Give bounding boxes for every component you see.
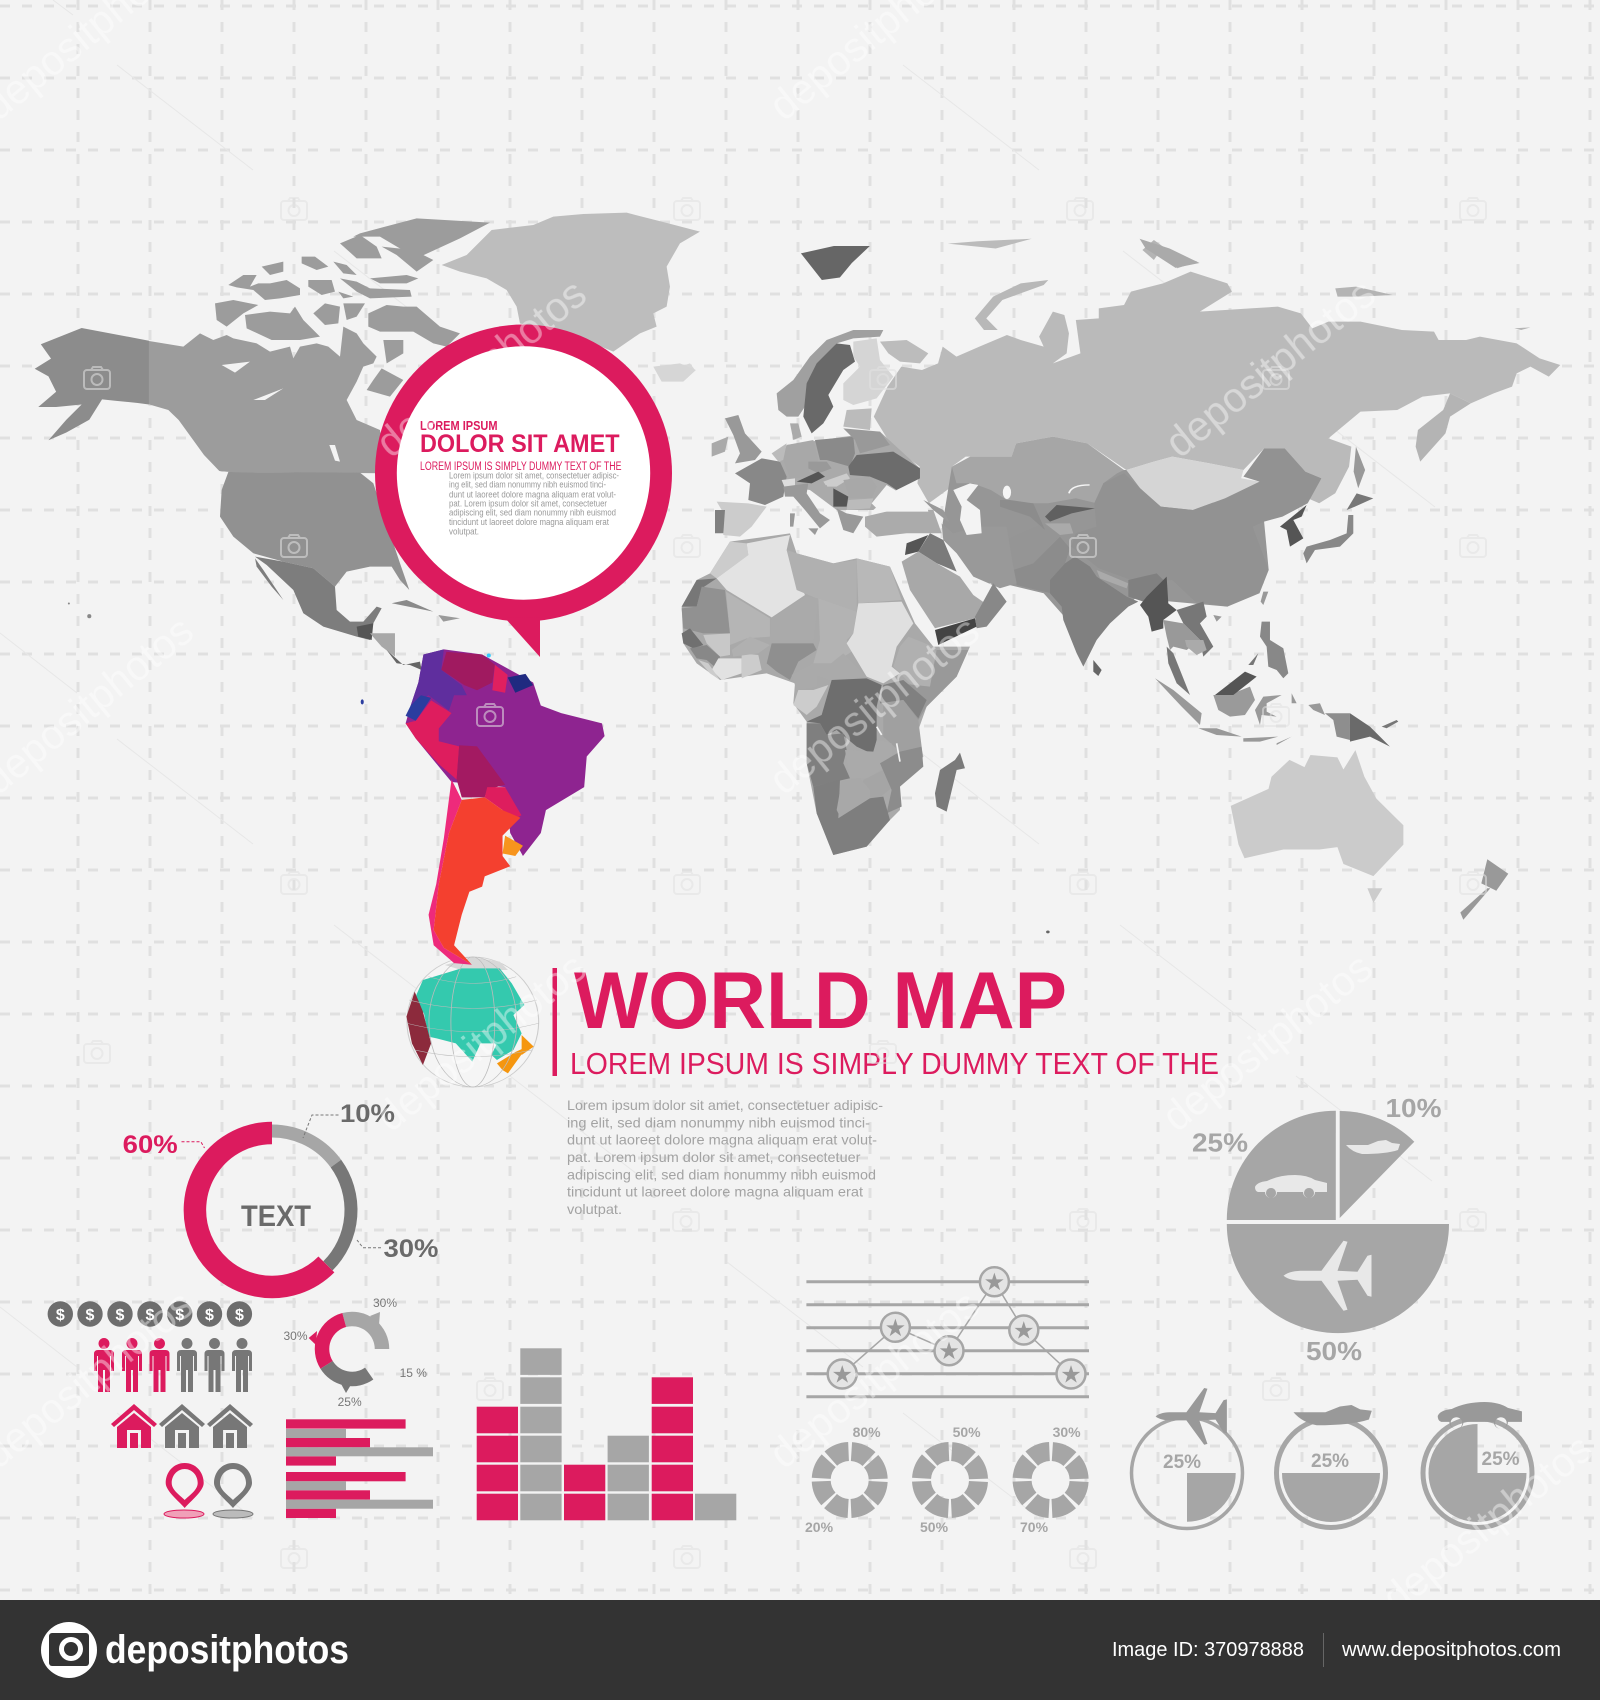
region: South America: [361, 649, 605, 965]
line chart with stars: [806, 1267, 1089, 1397]
callout text: DOLOR SIT AMET: [420, 430, 620, 458]
icon: globe: [406, 957, 539, 1087]
callout text: LOREM IPSUM: [420, 419, 498, 433]
logo: depositphotos: [105, 1628, 349, 1672]
line chart with stars: ★: [885, 1315, 906, 1342]
small donut chart: 30%: [373, 1296, 397, 1310]
icons: people: [94, 1338, 252, 1392]
icons: map pins: [164, 1463, 253, 1518]
body text: volutpat.: [567, 1201, 622, 1217]
text: depositphotos: [760, 606, 988, 803]
gauge: plane 25%: [1132, 1388, 1242, 1528]
text: depositphotos: [1156, 269, 1384, 466]
icons: coins: $: [235, 1307, 244, 1324]
icons: coins: $: [86, 1307, 95, 1324]
gauge: boat 25%: [1276, 1405, 1386, 1528]
body text: ing elit, sed diam nonummy nibh euismod tinci-: [567, 1114, 870, 1130]
segmented donuts: 70%: [1020, 1519, 1049, 1535]
map: Africa: [682, 533, 970, 855]
donut chart: 60 10 30: 10%: [340, 1100, 395, 1128]
text: depositphotos: [367, 269, 595, 466]
callout text: dunt ut laoreet dolore magna aliquam erat volut-: [449, 489, 616, 499]
text: depositphotos: [1373, 1424, 1600, 1621]
pie chart: transport: [1192, 1093, 1449, 1366]
callout text: pat. Lorem ipsum dolor sit amet, consectetuer: [449, 498, 607, 508]
map: Oceania and Arctic islands: [801, 239, 1508, 933]
line chart with stars: ★: [1060, 1362, 1082, 1388]
body text: [567, 1097, 883, 1217]
body text: dunt ut laoreet dolore magna aliquam erat volut-: [567, 1132, 877, 1148]
callout text: LOREM IPSUM IS SIMPLY DUMMY TEXT OF THE: [420, 461, 622, 473]
line chart with stars: ★: [831, 1362, 853, 1388]
donut chart: 60 10 30: 30%: [384, 1235, 438, 1263]
body text: pat. Lorem ipsum dolor sit amet, consectetuer: [567, 1149, 861, 1165]
stacked block chart: [477, 1348, 736, 1520]
map: North America: [149, 213, 700, 670]
icons: coins: $: [205, 1307, 214, 1324]
pie chart: transport: 10%: [1386, 1093, 1442, 1123]
small donut chart: 25%: [338, 1395, 362, 1409]
body text: tincidunt ut laoreet dolore magna aliquam erat: [567, 1184, 863, 1200]
pie chart: transport: 50%: [1306, 1336, 1362, 1366]
heading: world map: WORLD MAP: [574, 956, 1067, 1046]
icons: coins: $: [146, 1307, 155, 1324]
callout text: tincidunt ut laoreet dolore magna aliquam erat: [449, 517, 609, 527]
subheading: LOREM IPSUM IS SIMPLY DUMMY TEXT OF THE: [570, 1046, 1219, 1081]
gauge: plane 25%: 25%: [1163, 1452, 1201, 1473]
segmented donuts: 50%: [920, 1519, 949, 1535]
gauge: car 25%: 25%: [1482, 1449, 1520, 1470]
line chart with stars: ★: [1013, 1318, 1035, 1344]
icons: coins: [48, 1301, 252, 1327]
donut chart: 60 10 30: [123, 1100, 438, 1287]
gauge: car 25%: [1423, 1402, 1532, 1528]
body text: Lorem ipsum dolor sit amet, consectetuer adipisc-: [567, 1097, 883, 1113]
callout text: [420, 419, 622, 537]
body text: adipiscing elit, sed diam nonummy nibh euismod: [567, 1166, 876, 1182]
pie chart: transport: 25%: [1192, 1128, 1248, 1158]
segmented donuts: [805, 1424, 1081, 1535]
line chart with stars: ★: [984, 1269, 1005, 1296]
website: www.depositphotos.com: [1341, 1639, 1561, 1661]
text: depositphotos: [760, 1280, 988, 1477]
title block: [552, 956, 1219, 1081]
donut chart: 60 10 30: TEXT: [241, 1200, 311, 1233]
icons: coins: $: [116, 1307, 125, 1324]
small donut chart: 30%: [284, 1329, 308, 1343]
image id: Image ID: 370978888: [1112, 1639, 1304, 1661]
text: depositphotos: [1153, 943, 1381, 1140]
map: Alaska: [35, 328, 149, 618]
callout text: ing elit, sed diam nonummy nibh euismod tinci-: [449, 480, 606, 490]
segmented donuts: 20%: [805, 1519, 834, 1535]
callout pin: [375, 324, 672, 657]
segmented donuts: 50%: [953, 1424, 981, 1440]
segmented donuts: 80%: [853, 1424, 881, 1440]
small donut chart: [284, 1296, 427, 1409]
callout text: volutpat.: [449, 527, 479, 537]
gauge: boat 25%: 25%: [1311, 1451, 1349, 1472]
callout text: adipiscing elit, sed diam nonummy nibh euismod: [449, 508, 616, 518]
icons: coins: $: [175, 1307, 184, 1324]
map: Russia and Central Asia: [874, 240, 1560, 640]
icons: coins: $: [56, 1307, 65, 1324]
callout text: Lorem ipsum dolor sit amet, consectetuer adipisc-: [449, 470, 619, 480]
line chart with stars: ★: [938, 1338, 960, 1365]
map: South and East Asia: [1000, 493, 1398, 747]
segmented donuts: 30%: [1053, 1424, 1081, 1440]
footer bar: [0, 1600, 1600, 1700]
logo: [41, 1622, 349, 1678]
text: depositphotos: [367, 943, 595, 1140]
icons: houses: [111, 1404, 253, 1448]
horizontal bar chart: [286, 1419, 433, 1518]
donut chart: 60 10 30: 60%: [123, 1131, 178, 1159]
small donut chart: 15 %: [400, 1366, 427, 1380]
map: Europe and Middle East: [680, 330, 1017, 645]
